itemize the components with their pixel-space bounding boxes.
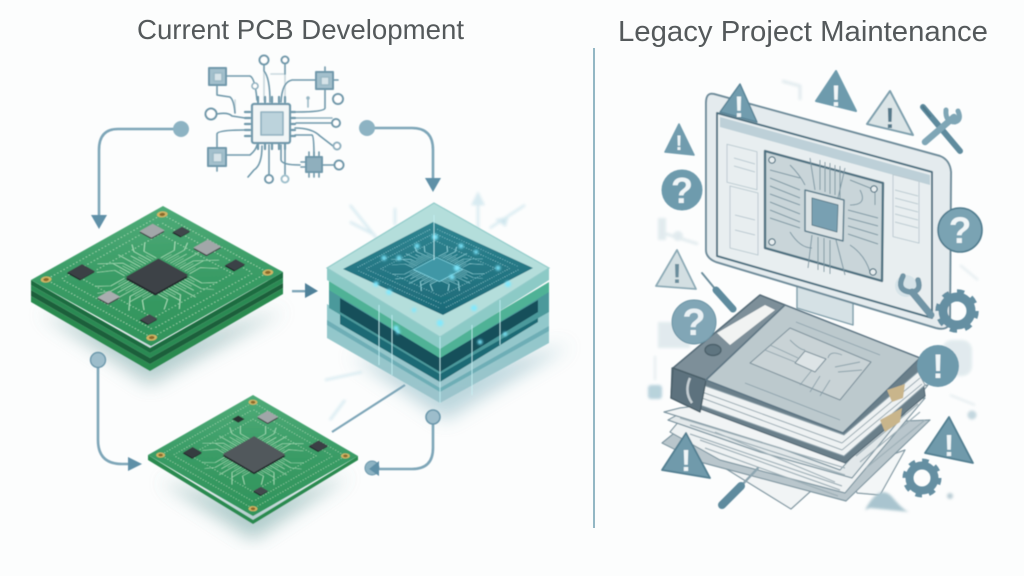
- label strip and ring: [717, 305, 775, 345]
- paper stack: [662, 378, 930, 509]
- edge: [148, 455, 358, 524]
- icon: circuit schematic: [206, 56, 344, 183]
- panel: legacy project maintenance: [648, 71, 982, 512]
- icon: small warning: [665, 124, 694, 155]
- title: Current PCB Development: Current PCB Development: [137, 14, 464, 45]
- screen PCB: [765, 151, 883, 281]
- bottom PCB board: [148, 395, 358, 540]
- icon: question right: [938, 208, 982, 252]
- screen side panels: [727, 144, 919, 255]
- icon: outlined warning: [867, 91, 913, 135]
- icon: light warning left: !: [672, 258, 682, 289]
- screen: [717, 113, 932, 318]
- icon: gear lower: [905, 461, 939, 495]
- binder: [671, 295, 925, 463]
- screen chip: [805, 190, 844, 241]
- faded blob: [865, 492, 910, 512]
- arrow: schematic to PCB stack: [91, 121, 189, 229]
- cover print: [750, 328, 871, 400]
- icon: warning lower right: !: [944, 428, 954, 463]
- shadow: [350, 345, 570, 420]
- stand: [797, 285, 853, 325]
- icon: question left: ?: [671, 170, 693, 211]
- icon: crossed tools: [923, 107, 960, 151]
- icon: question lower left: [672, 300, 716, 344]
- arrow: PCB stack to bottom board: [90, 352, 142, 471]
- icon: warning lower left: [662, 433, 710, 478]
- arrow: 3D stack feedback to board: [332, 385, 440, 476]
- back cover and pages: [671, 358, 925, 463]
- icon: warning top: [816, 71, 856, 113]
- cover: [706, 305, 920, 433]
- PCB stack: [31, 206, 285, 385]
- icon: warning on monitor: [720, 84, 757, 124]
- bezel: [706, 94, 951, 329]
- icon: wrench on monitor: [895, 275, 931, 315]
- triangles and question icons: [656, 71, 982, 478]
- icon: outlined warning: !: [885, 103, 895, 135]
- top glass plate: [327, 203, 549, 337]
- icon: warning on monitor: !: [734, 91, 744, 124]
- arrow: schematic to 3D stack: [359, 120, 441, 192]
- top board: [31, 206, 283, 346]
- 3D glass PCB stack: [325, 194, 570, 420]
- lower board layers: [31, 272, 283, 371]
- icon: warning top: !: [831, 80, 841, 113]
- icon: exclamation circle: !: [932, 348, 944, 386]
- faded background marks: [648, 81, 978, 499]
- monitor: [706, 94, 951, 329]
- icon: light warning left: [656, 250, 696, 289]
- shadow: [40, 310, 285, 385]
- icon: small warning: !: [676, 132, 682, 155]
- faded data arrows: [325, 194, 525, 420]
- spine: [673, 295, 785, 380]
- glowing nodes: [373, 234, 511, 344]
- arrow: PCB stack to 3D stack: [292, 283, 318, 298]
- icon: warning lower right: [925, 417, 973, 463]
- icon: question left: [662, 170, 702, 211]
- inner circuit layer: [343, 222, 533, 315]
- vertical light lines: [379, 215, 500, 403]
- icon: screwdriver lower: [722, 468, 758, 505]
- icon: exclamation circle: [917, 345, 959, 387]
- lower plates: [327, 268, 549, 403]
- shadow: [160, 475, 350, 540]
- vertical divider: [593, 48, 595, 528]
- icon: screwdriver upper: [702, 273, 733, 309]
- icon: warning lower left: !: [681, 443, 691, 478]
- icon: question right: ?: [949, 210, 971, 251]
- sticky tabs: [887, 384, 905, 402]
- icon: question lower left: ?: [682, 302, 706, 344]
- panel: current PCB development: [31, 56, 570, 540]
- icon: gear upper: [938, 292, 976, 330]
- title: Legacy Project Maintenance: Legacy Project Maintenance: [618, 16, 988, 48]
